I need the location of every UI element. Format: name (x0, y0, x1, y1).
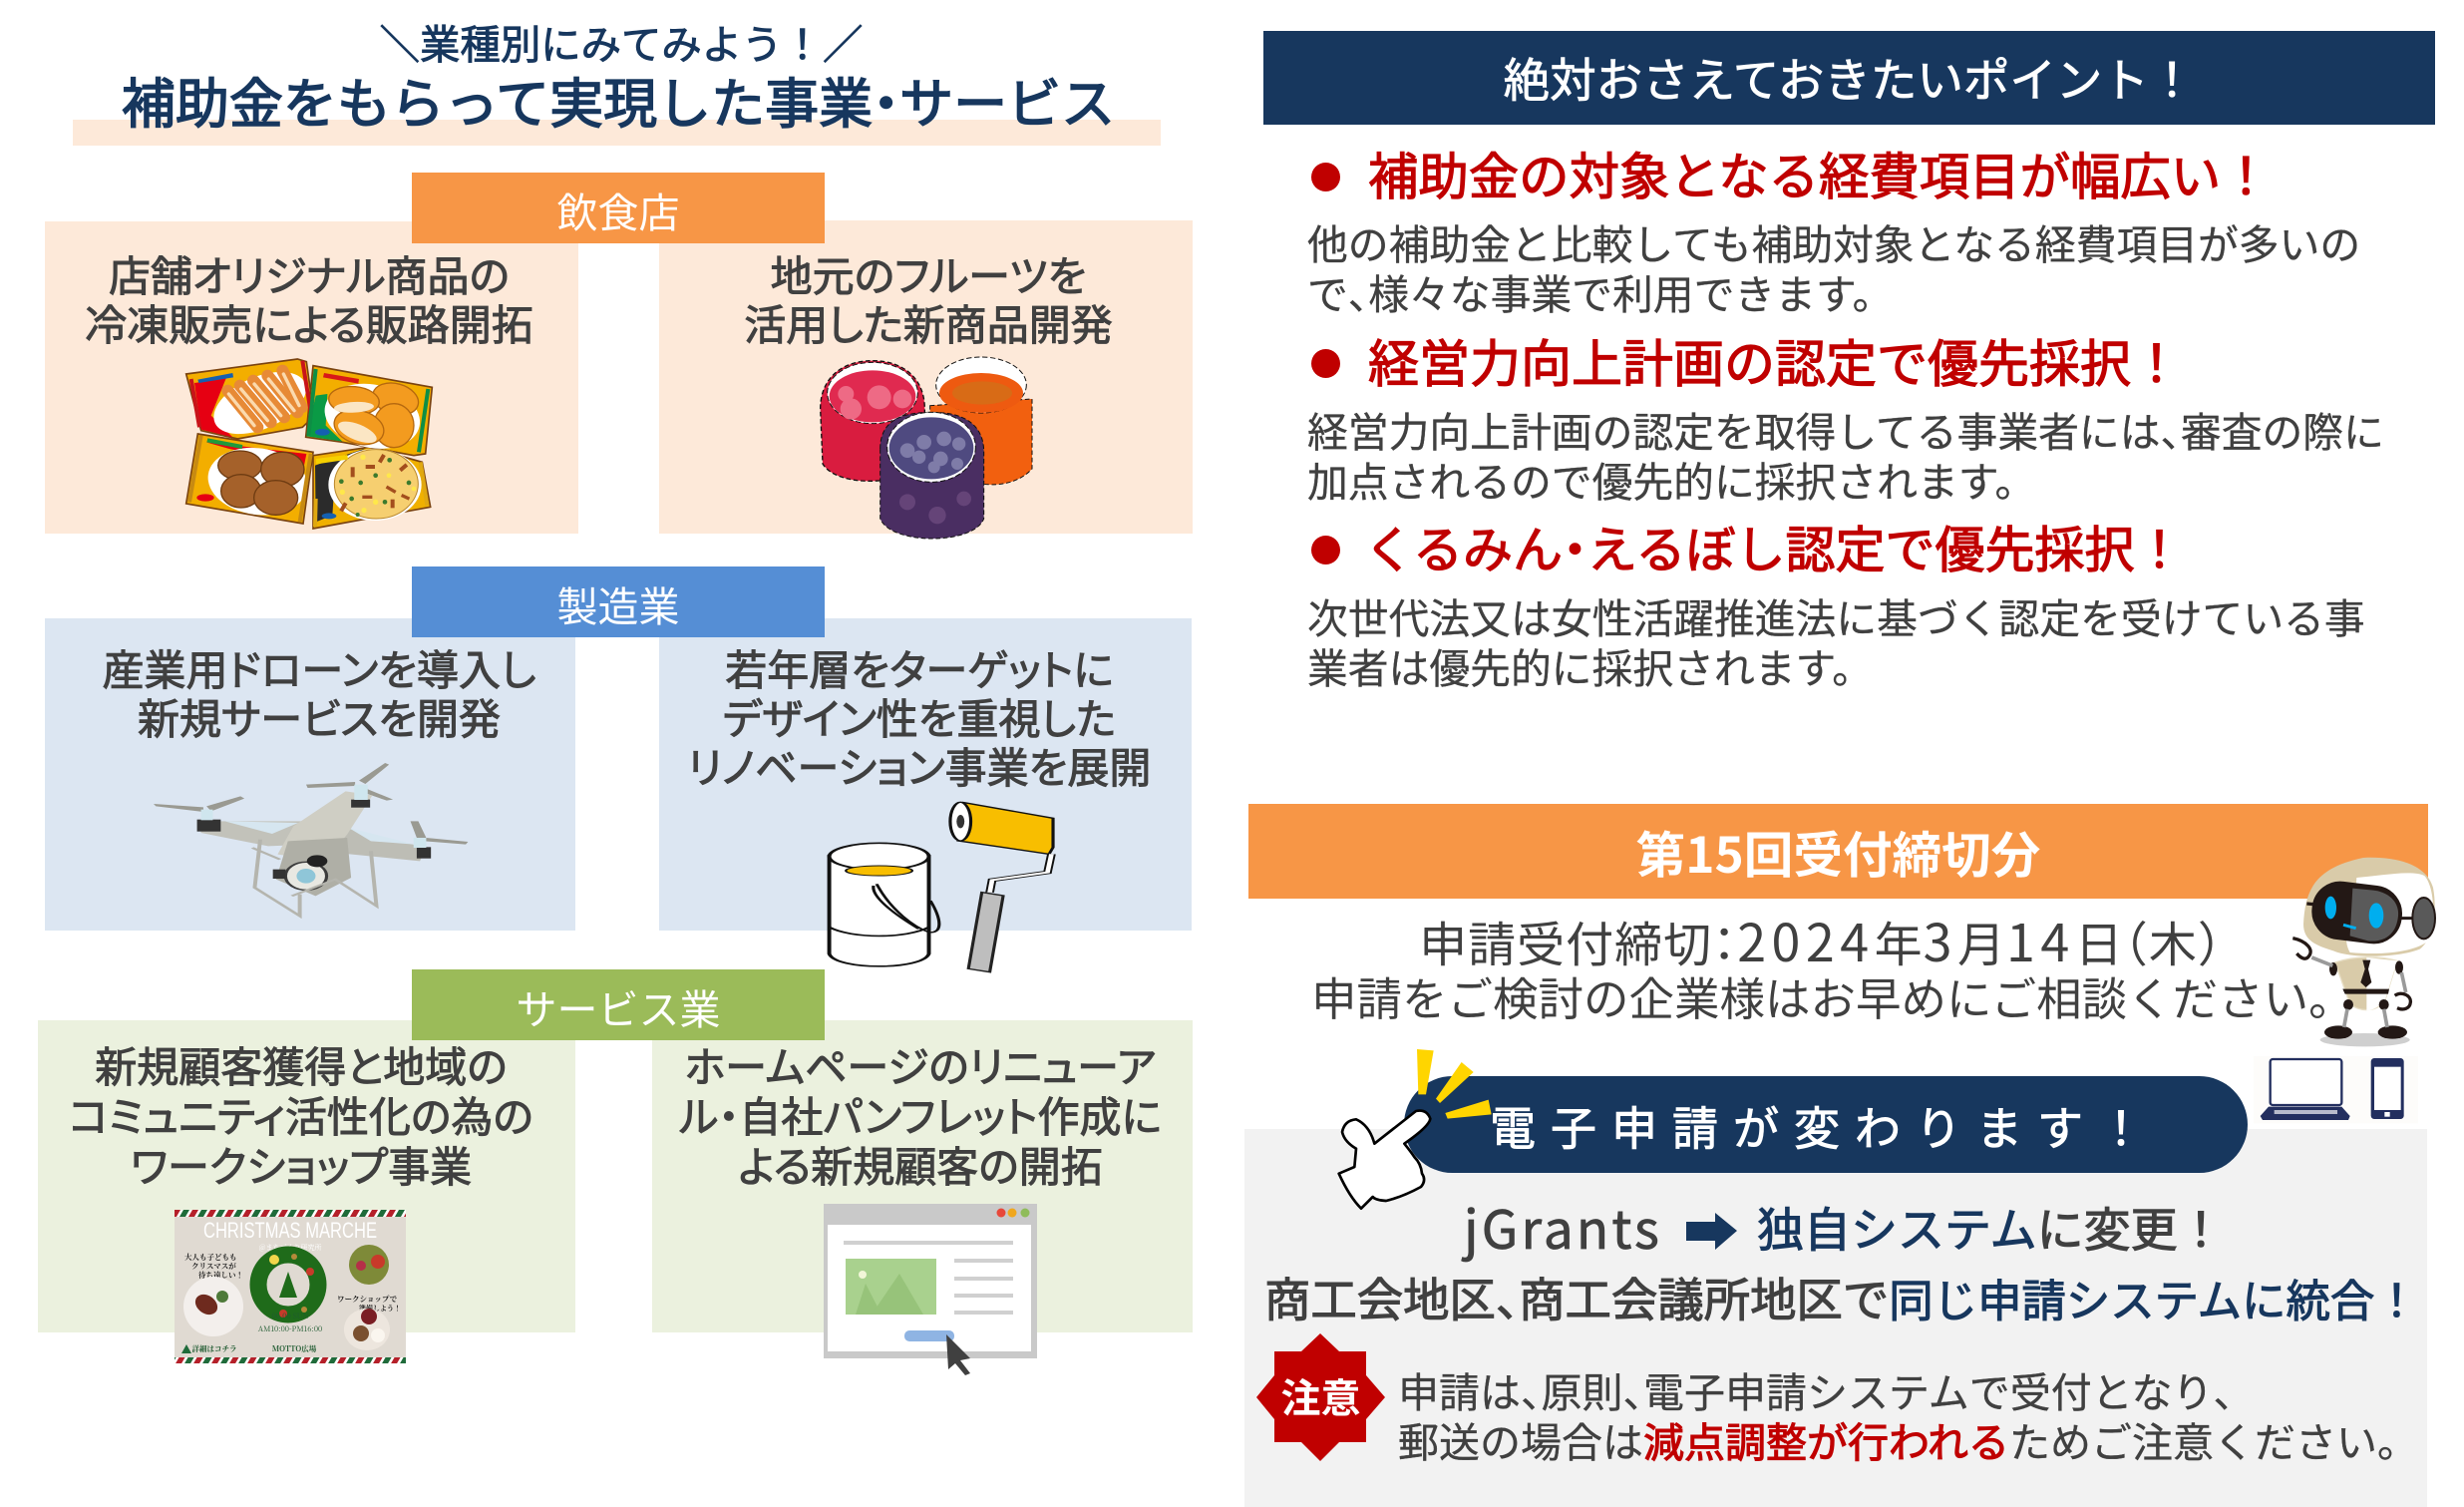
point text 1: 他の補助金と比較しても補助対象となる経費項目が多いの (1307, 212, 2360, 271)
text: 新商品開発: 地元のフルーツを (771, 243, 1086, 304)
text: 新規顧客獲得: コミュニティ活性化の為の (69, 1083, 533, 1145)
notice text: 郵送の場合は減点調整が行われるためご注意ください。 (1398, 1409, 2418, 1469)
notice text: 申請は、原則、電子申請システムで受付となり、 (1398, 1359, 2234, 1419)
text: ホームページ: ル・自社パンフレット作成に (679, 1083, 1162, 1145)
text: 若年層 (688, 637, 1151, 796)
image: Christmas marche poster: AM10:00-PM16:00 (258, 1323, 322, 1334)
text: 冷凍販売 (85, 243, 533, 353)
text: ドローン導入: 産業用ドローンを導入し (102, 637, 536, 698)
point text 2: 経営力向上計画の認定を取得してる事業者には、審査の際に (1307, 400, 2384, 459)
point text 2 (1307, 400, 2384, 509)
arrow (1686, 1213, 1737, 1250)
badge label: 注意 (1280, 1366, 1360, 1424)
tag: 飲食店 (412, 173, 825, 243)
header: 絶対おさえておきたいポイント (1263, 31, 2435, 125)
text: 同じ申請システムに統合: 商工会地区、商工会議所地区で同じ申請システムに統合！ (1264, 1264, 2419, 1330)
pill: 電子申請が変わります: 電子申請が変わります！ (1490, 1093, 2159, 1159)
header: 絶対おさえておきたいポイント: 絶対おさえておきたいポイント！ (1504, 44, 2195, 111)
bullet 1 (1311, 163, 1340, 191)
icon: frozen food packets (185, 358, 433, 530)
icon: pointing hand (1337, 1049, 1492, 1211)
tag: 飲食店: 飲食店 (556, 180, 680, 239)
text: 新規顧客獲得: ワークショップ事業 (131, 1133, 472, 1195)
subtitle: ＼業種別にみてみよう！／ (380, 12, 863, 71)
title: 補助金をもらって実現した事業・サービス (122, 60, 1115, 139)
point text 3: 業者は優先的に採択されます。 (1307, 636, 1873, 694)
point heading 2: 経営力向上計画の認定で優先採択！ (1368, 323, 2182, 397)
point heading 3: くるみん・えるぼし認定で優先採択！ (1364, 511, 2184, 582)
image: Christmas marche poster: ワークショップで (337, 1294, 398, 1305)
image: Christmas marche poster: 大人も子どもも (184, 1252, 237, 1263)
image: Christmas marche poster: クリスマスが (191, 1261, 236, 1272)
bullet 2 (1311, 349, 1340, 378)
panel: ワークショップ事業 (38, 1020, 575, 1332)
text: 新規顧客獲得: 新規顧客獲得と地域の (95, 1033, 508, 1095)
deadline date: 申請受付締切：2024年3月14日（木） (1419, 902, 2223, 976)
point text 2: 加点されるので優先的に採択されます。 (1307, 449, 2035, 509)
label: 独自システムに変更: 独自システムに変更！ (1757, 1192, 2225, 1261)
image: Christmas marche poster: 準備しよう！ (359, 1304, 401, 1314)
text: 新規顧客獲得 (69, 1033, 533, 1195)
text: 若年層: リノベーション事業を展開 (688, 735, 1151, 796)
point text 1: で、様々な事業で利用できます。 (1307, 261, 1893, 321)
text: 若年層: 若年層をターゲットに (725, 637, 1114, 698)
text: ホームページ: よる新規顧客の開拓 (738, 1133, 1103, 1195)
text: 若年層: デザイン性を重視した (723, 686, 1116, 747)
panel: ホームページリニューアル (652, 1020, 1193, 1332)
panel: 地元のフルーツ (659, 220, 1193, 534)
text: ホームページ: ホームページのリニューア (685, 1033, 1156, 1095)
tag: 製造業: 製造業 (556, 573, 680, 633)
consultation note: 申請をご検討の企業様はお早めにご相談ください。 (1311, 963, 2354, 1029)
point heading 1: 補助金の対象となる経費項目が幅広い！ (1368, 137, 2272, 209)
text: ドローン導入 (102, 637, 536, 747)
icon: laptop and smartphone (2260, 1057, 2404, 1120)
image: Christmas marche poster: ＠まちづくり研究所 (259, 1243, 321, 1253)
label: jGrants: jGrants (1464, 1189, 1662, 1265)
icon: robot (2292, 858, 2436, 1047)
image: Christmas marche poster: 詳細はコチラ (191, 1343, 237, 1354)
text: ドローン導入: 新規サービスを開発 (138, 686, 501, 747)
icon: fruit jars (820, 357, 1033, 539)
tag: サービス業: サービス業 (517, 976, 720, 1036)
deadline text (1311, 902, 2354, 1029)
tag: 製造業 (412, 566, 825, 637)
text: jGrants to 独自システム (1461, 1189, 2225, 1265)
text: ホームページ (679, 1033, 1162, 1195)
band: 第15回受付締切分 (1248, 804, 2428, 899)
image: Christmas marche poster: MOTTO広場 (272, 1343, 317, 1354)
image: Christmas marche poster: 00.00 SUN (271, 1311, 309, 1321)
text: 冷凍販売: 店舗オリジナル商品の (109, 243, 510, 304)
panel: 電子申請 grey background (1244, 1129, 2427, 1507)
image: Christmas marche poster: 待ち遠しい！ (198, 1270, 243, 1281)
text: 新商品開発 (744, 243, 1113, 353)
badge shape (1256, 1333, 1385, 1461)
text: 冷凍販売: 冷凍販売による販路開拓 (85, 292, 533, 353)
icon: browser window with cursor (824, 1204, 1037, 1375)
image: Christmas marche poster (175, 1210, 406, 1363)
panel: 店舗オリジナル商品 (45, 221, 578, 534)
notice text (1398, 1359, 2418, 1469)
icon: paint bucket and roller (828, 802, 1056, 973)
bullet 3 (1311, 536, 1340, 565)
point text 3 (1307, 586, 2365, 694)
title highlight band (73, 120, 1161, 146)
tag: サービス業 (412, 969, 825, 1040)
point text 1 (1307, 212, 2360, 321)
image: Christmas marche poster: CHRISTMAS MARCHE (203, 1218, 377, 1243)
panel: リノベーション事業 (659, 618, 1192, 931)
badge: 注意 (1256, 1333, 1385, 1461)
text: 新商品開発: 活用した新商品開発 (744, 292, 1113, 353)
point text 3: 次世代法又は女性活躍推進法に基づく認定を受けている事 (1307, 586, 2365, 645)
pill: 電子申請が変わります (1404, 1076, 2248, 1173)
panel: 産業用ドローン (45, 618, 575, 931)
icon: drone (154, 763, 469, 919)
band: 第15回受付締切分: 第15回受付締切分 (1636, 816, 2040, 888)
